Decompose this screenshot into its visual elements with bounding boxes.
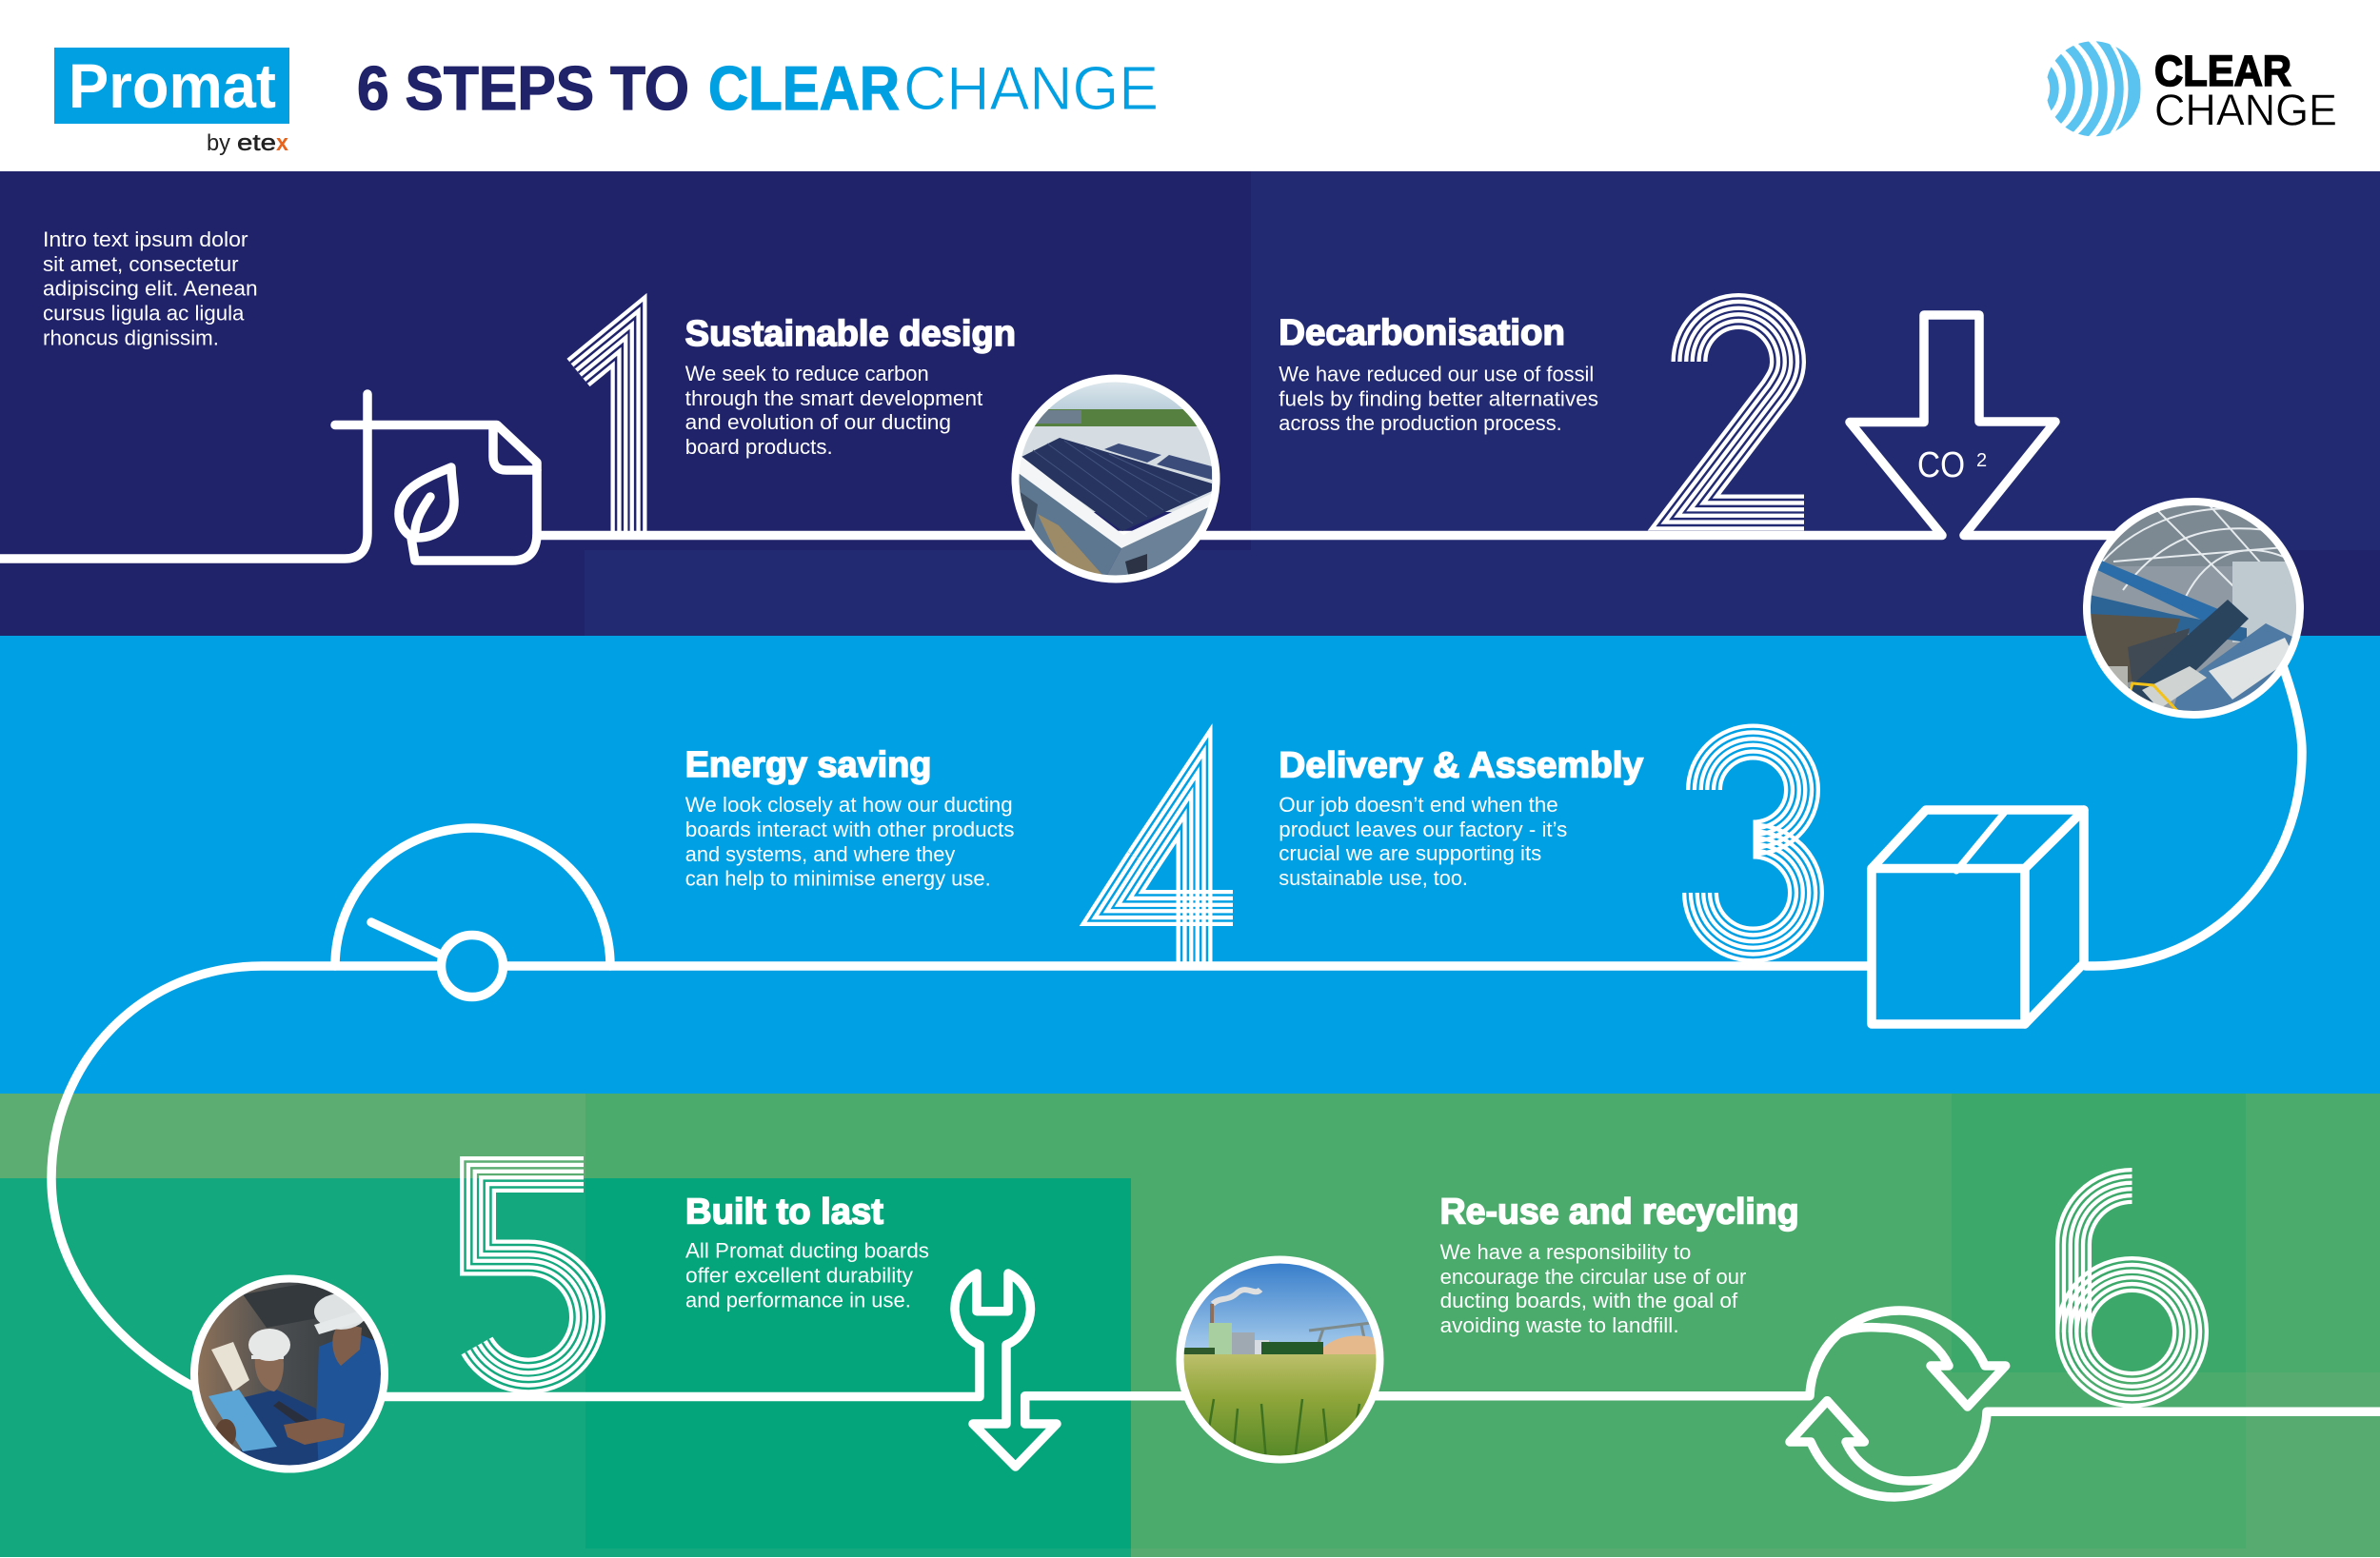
step 6 text: Re-use and recycling: ducting boards, with the goal of (1440, 1289, 1738, 1312)
step 4 text: Energy saving: We look closely at how our ducting (685, 793, 1013, 817)
step 3 text: Delivery and Assembly: crucial we are supporting its (1279, 841, 1541, 865)
panel: navy band (0, 171, 2380, 636)
intro text: cursus ligula ac ligula (43, 302, 245, 325)
step 2 text: Decarbonisation: fuels by finding better alternatives (1279, 386, 1598, 410)
title: CHANGE (903, 53, 1159, 123)
title: 6 STEPS TO (357, 53, 689, 123)
step 3 text: Delivery and Assembly: Delivery & Assembly (1279, 746, 1643, 786)
step 1 text: Sustainable design: through the smart development (685, 386, 983, 410)
number 3 (1682, 723, 1824, 961)
intro text: adipiscing elit. Aenean (43, 276, 258, 301)
intro text: Intro text ipsum dolor (43, 227, 248, 251)
connector line: step 2 photo round to delivery box (2086, 666, 2302, 966)
step 2 text: Decarbonisation: We have reduced our use of fossil (1279, 362, 1594, 386)
step 1 text: Sustainable design: and evolution of our ducting (685, 410, 951, 434)
intro text: rhoncus dignissim. (43, 325, 219, 349)
number 6 (2055, 1168, 2209, 1407)
number 1 (567, 293, 647, 531)
logo: Promat: ete (237, 130, 276, 156)
icon: energy gauge (335, 828, 610, 997)
step 5 text: Built to last: offer excellent durability (685, 1263, 914, 1287)
step 4 text: Energy saving: boards interact with other products (685, 818, 1015, 841)
icon: wrench with arrow and connector line (381, 1273, 1190, 1467)
step 6 text: Re-use and recycling: avoiding waste to landfill. (1440, 1313, 1679, 1337)
number 2 (1647, 293, 1806, 531)
step 6 text: Re-use and recycling: Re-use and recycling (1440, 1193, 1799, 1233)
step 3 text: Delivery and Assembly (1279, 746, 1643, 890)
icon: recycling arrows and connector line (1376, 1311, 2380, 1497)
step 2 text: Decarbonisation (1279, 313, 1598, 435)
step 6 text: Re-use and recycling (1440, 1193, 1799, 1337)
icon: CO2 down arrow and connector line: 2 (1976, 450, 1987, 471)
logo: ClearChange: CHANGE (2154, 86, 2337, 135)
logo: Promat: x (276, 130, 289, 156)
step 1 text: Sustainable design: We seek to reduce carbon (685, 362, 929, 385)
logo: ClearChange (2047, 41, 2335, 137)
step 2 text: Decarbonisation: across the production process. (1279, 411, 1562, 435)
icon: CO2 down arrow and connector line (537, 315, 2118, 535)
panel: green band (0, 1094, 2380, 1557)
panel: blue band (0, 636, 2380, 1094)
step 4 text: Energy saving (685, 745, 1015, 891)
number 4 (1080, 723, 1233, 961)
step 5 text: Built to last: Built to last (685, 1193, 883, 1233)
number 5 (460, 1156, 605, 1392)
step 5 text: Built to last: and performance in use. (685, 1288, 911, 1311)
header background (0, 0, 2380, 171)
photo: factory beside wheat field (1177, 1256, 1384, 1464)
photo: recycling plant interior (2085, 500, 2304, 719)
connector line: delivery box round to step 5 photo (51, 966, 1868, 1388)
logo: Promat: Promat (69, 50, 276, 121)
photo: two engineers in helmets (190, 1275, 390, 1475)
logo: ClearChange: CLEAR (2154, 47, 2291, 95)
step 1 text: Sustainable design (685, 314, 1016, 459)
step 3 text: Delivery and Assembly: Our job doesn’t end when the (1279, 793, 1558, 817)
title (357, 53, 1159, 123)
step 5 text: Built to last (685, 1193, 929, 1311)
photo: solar roof building (1009, 376, 1222, 595)
logo: Promat (54, 48, 289, 156)
step 3 text: Delivery and Assembly: product leaves our factory - it’s (1279, 818, 1567, 841)
step 4 text: Energy saving: and systems, and where they (685, 842, 956, 866)
step 2 text: Decarbonisation: Decarbonisation (1279, 313, 1565, 353)
step 4 text: Energy saving: Energy saving (685, 745, 931, 785)
icon: delivery box (1872, 810, 2084, 1024)
step 4 text: Energy saving: can help to minimise energy use. (685, 867, 991, 891)
intro text: sit amet, consectetur (43, 252, 239, 276)
icon: document with leaf (335, 424, 537, 561)
step 1 text: Sustainable design: board products. (685, 435, 833, 459)
step 3 text: Delivery and Assembly: sustainable use, too. (1279, 866, 1468, 890)
connector line: start to document icon (0, 394, 367, 559)
step 6 text: Re-use and recycling: encourage the circular use of our (1440, 1265, 1747, 1289)
logo: Promat: by (207, 130, 230, 156)
icon: CO2 down arrow and connector line: CO (1917, 445, 1965, 485)
step 6 text: Re-use and recycling: We have a responsibility to (1440, 1240, 1691, 1264)
step 1 text: Sustainable design: Sustainable design (685, 314, 1016, 354)
step 5 text: Built to last: All Promat ducting boards (685, 1239, 929, 1263)
intro text (43, 227, 258, 349)
title: CLEAR (708, 53, 900, 123)
